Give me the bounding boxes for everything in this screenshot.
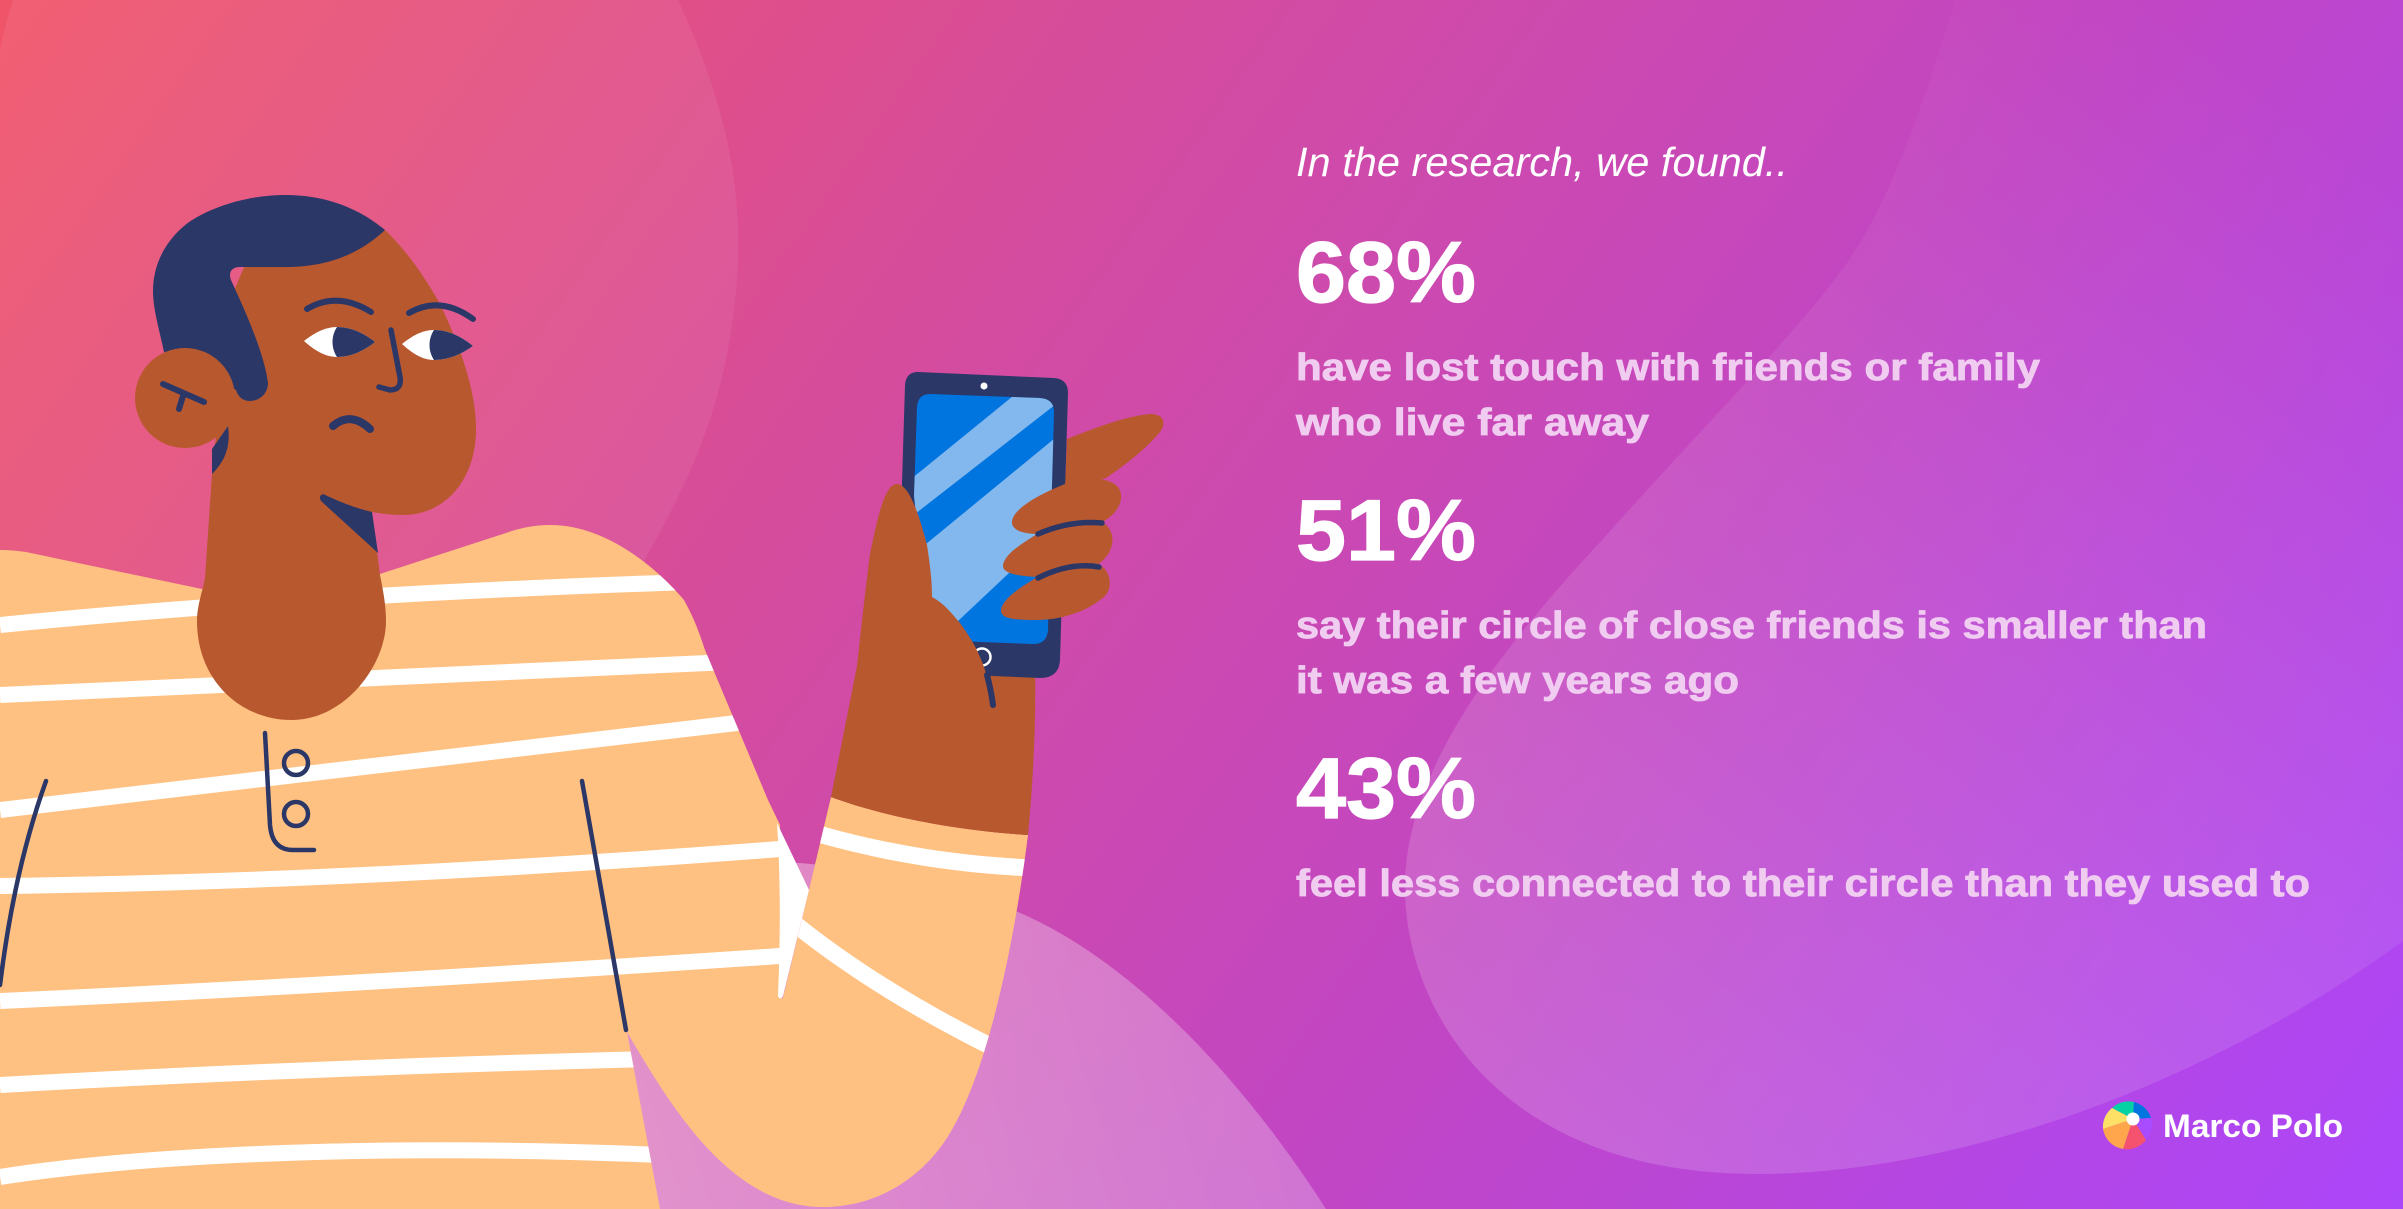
stat: 68% <box>1295 225 2040 444</box>
background blob: right <box>1405 0 2403 1174</box>
stat: 68%: have lost touch with friends or family <box>1296 347 2040 389</box>
shirt body <box>0 525 780 1209</box>
phone <box>900 372 1068 678</box>
white wedge under arm <box>777 823 809 998</box>
stat: 43%: feel less connected to their circle than they used to <box>1296 863 2310 905</box>
stat: 43%: 43% <box>1296 741 1476 837</box>
sleeve <box>627 797 1035 1207</box>
stat: 68%: 68% <box>1296 225 1476 321</box>
wordmark: Marco Polo <box>2163 1108 2343 1144</box>
neck shadow <box>320 494 378 553</box>
neck and face <box>197 230 476 720</box>
background blob: upper left <box>0 0 738 610</box>
stat: 68%: who live far away <box>1295 402 1649 444</box>
logo: Marco Polo <box>2103 1101 2343 1149</box>
brows, nose and mouth <box>307 301 473 429</box>
stat: 51%: 51% <box>1296 483 1476 579</box>
palm behind phone <box>831 660 1035 835</box>
stat: 51%: say their circle of close friends is smaller than <box>1296 605 2207 647</box>
finger creases <box>1038 522 1102 578</box>
right eye <box>402 330 473 360</box>
hand and thumb <box>831 484 1028 835</box>
left eye <box>304 327 375 357</box>
ear <box>135 348 235 448</box>
thumb crease <box>987 675 993 705</box>
shirt fold lines <box>0 781 626 1030</box>
background blob: lower pink <box>600 863 1326 1209</box>
stat: 51%: it was a few years ago <box>1296 660 1739 702</box>
icon: beach ball <box>2103 1101 2152 1149</box>
stat: 43% <box>1296 741 2310 905</box>
shirt placket and buttons <box>265 733 314 850</box>
fingers <box>1001 414 1163 620</box>
illustration: person holding phone <box>0 195 1163 1209</box>
intro text: In the research, we found.. <box>1296 139 1788 185</box>
hair <box>153 195 385 401</box>
hair behind ear <box>212 426 229 474</box>
stat: 51% <box>1296 483 2207 702</box>
